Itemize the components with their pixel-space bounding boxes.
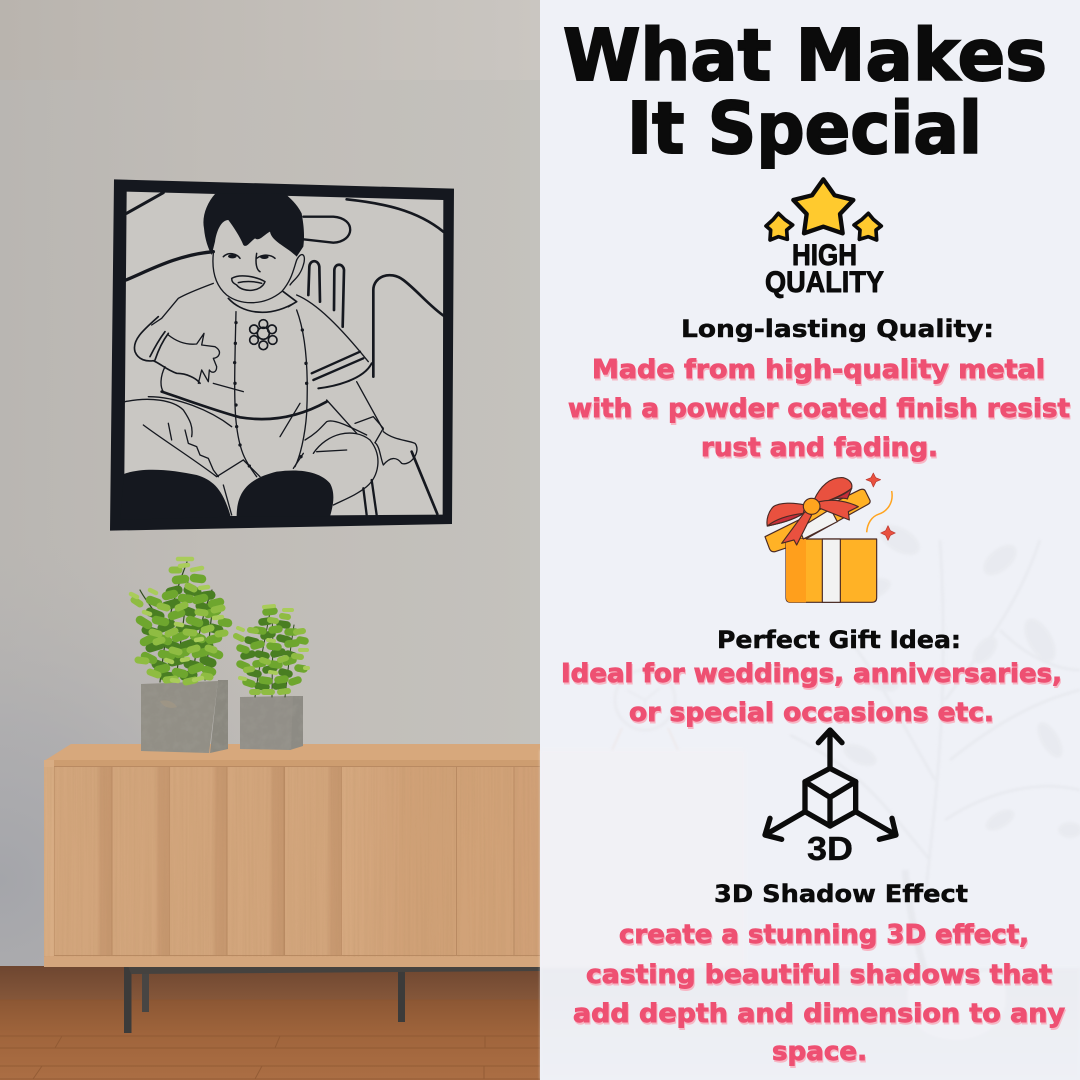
- doors: [54, 767, 540, 955]
- text: gift description: [561, 659, 1062, 728]
- icon: high quality stars: [765, 179, 884, 299]
- icon: high quality stars: QUALITY: [765, 266, 884, 299]
- frame interior: [124, 192, 443, 517]
- heading: 3D shadow effect: 3D Shadow Effect: [714, 880, 968, 908]
- button dots: [233, 321, 308, 468]
- dark knees: [120, 470, 333, 520]
- shirt buttons: [235, 310, 307, 477]
- heading: long-lasting quality: Long-lasting Quality:: [681, 315, 994, 343]
- text: 3D description: [573, 920, 1065, 1067]
- icon: high quality stars: HIGH: [792, 239, 857, 272]
- plant pots: [141, 680, 303, 754]
- heading: perfect gift idea: Perfect Gift Idea:: [717, 626, 961, 654]
- eyes: [228, 254, 269, 259]
- hair: [203, 193, 304, 257]
- text: 3D description: casting beautiful shadows that: [586, 960, 1052, 990]
- figure outlines: [125, 253, 417, 515]
- text: gift description: Ideal for weddings, anniversaries,: [561, 659, 1062, 689]
- icon: gift box: [765, 473, 895, 602]
- text: 3D description: add depth and dimension to any: [573, 999, 1065, 1029]
- plant: right: [236, 606, 308, 697]
- text: 3D description: space.: [772, 1037, 867, 1067]
- sideboard: [44, 744, 540, 967]
- panel: features: [540, 0, 1080, 1080]
- sleeve stripes and waist line: [162, 352, 363, 419]
- metal wall art portrait: [110, 179, 454, 531]
- panel: room photo: [0, 0, 540, 1080]
- ghost room background: [540, 519, 1080, 1080]
- title: What Makes: [563, 14, 1047, 97]
- text: quality description: rust and fading.: [701, 433, 938, 463]
- panel background: [540, 0, 1080, 1080]
- background shapes: [126, 193, 445, 515]
- sideboard legs: [124, 966, 540, 1033]
- text: 3D description: create a stunning 3D effect,: [619, 920, 1029, 950]
- text: quality description: [568, 355, 1070, 463]
- text: quality description: Made from high-quality metal: [592, 355, 1045, 385]
- flower: [250, 320, 277, 350]
- text: quality description: with a powder coated finish resist: [568, 394, 1070, 424]
- plants: [131, 559, 308, 697]
- text: gift description: or special occasions etc.: [629, 698, 994, 728]
- title: [563, 14, 1047, 170]
- frame: [110, 179, 454, 531]
- face details: [223, 253, 275, 290]
- floor: [0, 966, 540, 1080]
- title: It Special: [627, 87, 982, 170]
- plant: left: [131, 559, 228, 682]
- wall: [0, 0, 540, 970]
- icon: 3D cube: 3D: [807, 830, 853, 867]
- icon: 3D cube: [765, 730, 896, 867]
